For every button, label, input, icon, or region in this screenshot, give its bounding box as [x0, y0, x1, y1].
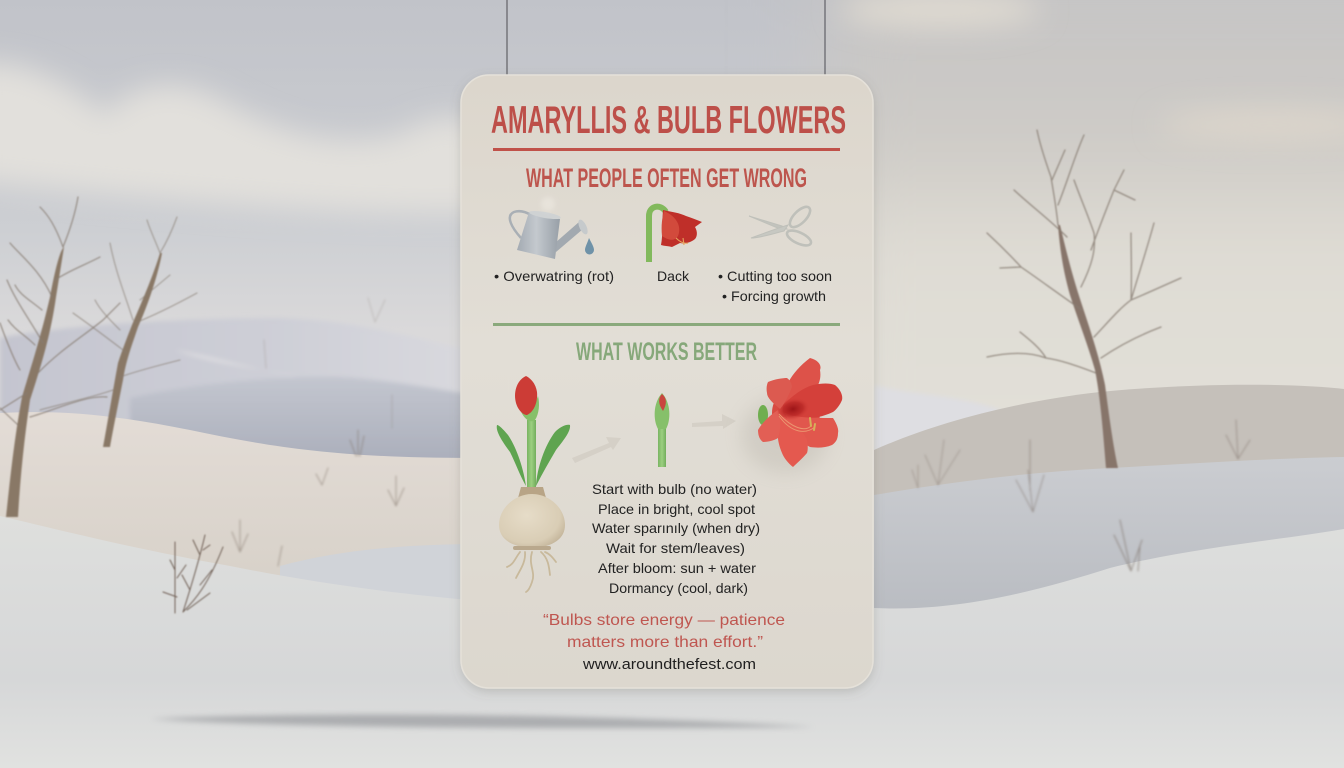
text: growing steps: After bloom: sun + water	[598, 560, 756, 576]
heading: what people often get wrong: WHAT PEOPLE OFTEN GET WRONG	[526, 163, 807, 193]
section divider	[493, 323, 840, 326]
quote: matters more than effort.”	[567, 634, 763, 651]
text: wrong-list labels: Dack	[657, 268, 690, 284]
beige hill left	[0, 412, 470, 620]
shrubs right	[912, 420, 1250, 571]
icon: drooping flower	[649, 207, 702, 262]
text: wrong-list labels: • Cutting too soon	[718, 268, 832, 284]
text: growing steps: Water sparınıly (when dry)	[592, 520, 760, 536]
icon: watering can	[510, 197, 594, 259]
text: growing steps: Place in bright, cool spot	[598, 501, 755, 517]
text: growing steps: Start with bulb (no water)	[592, 481, 757, 497]
text: growing steps: Wait for stem/leaves)	[606, 540, 745, 556]
icon: bulb plant	[497, 376, 570, 592]
icon: amaryllis bloom	[741, 358, 842, 473]
text: growing steps: Dormancy (cool, dark)	[609, 580, 748, 596]
pale blue drift left	[280, 544, 470, 620]
text: wrong-list labels	[494, 268, 832, 304]
ground shadow	[150, 714, 815, 728]
icon: budding stem	[655, 393, 669, 467]
arrow: bulb to stem	[572, 437, 621, 463]
text: growing steps	[592, 481, 760, 596]
heading: what works better: WHAT WORKS BETTER	[576, 338, 757, 366]
distant hills left	[0, 318, 1000, 470]
icon: scissors	[749, 204, 813, 248]
tree: far left	[0, 197, 120, 517]
panel: hanging sign card	[461, 75, 873, 688]
small shrubs left	[232, 298, 404, 566]
quote: “Bulbs store energy — patience	[543, 612, 785, 629]
website url: www.aroundthefest.com	[582, 656, 756, 673]
title: AMARYLLIS & BULB FLOWERS	[491, 99, 846, 142]
beige hill right	[874, 385, 1344, 520]
title divider	[493, 148, 840, 151]
quote	[543, 612, 785, 651]
arrow: stem to flower	[692, 414, 736, 429]
shrub foreground left	[163, 535, 223, 613]
text: wrong-list labels: • Overwatring (rot)	[494, 268, 614, 284]
blue snow right	[874, 457, 1344, 640]
hanging strings	[507, 0, 825, 76]
foreground snow	[0, 516, 1344, 768]
tree: second left	[40, 217, 197, 447]
tree: right	[987, 130, 1181, 468]
text: wrong-list labels: • Forcing growth	[722, 288, 826, 304]
